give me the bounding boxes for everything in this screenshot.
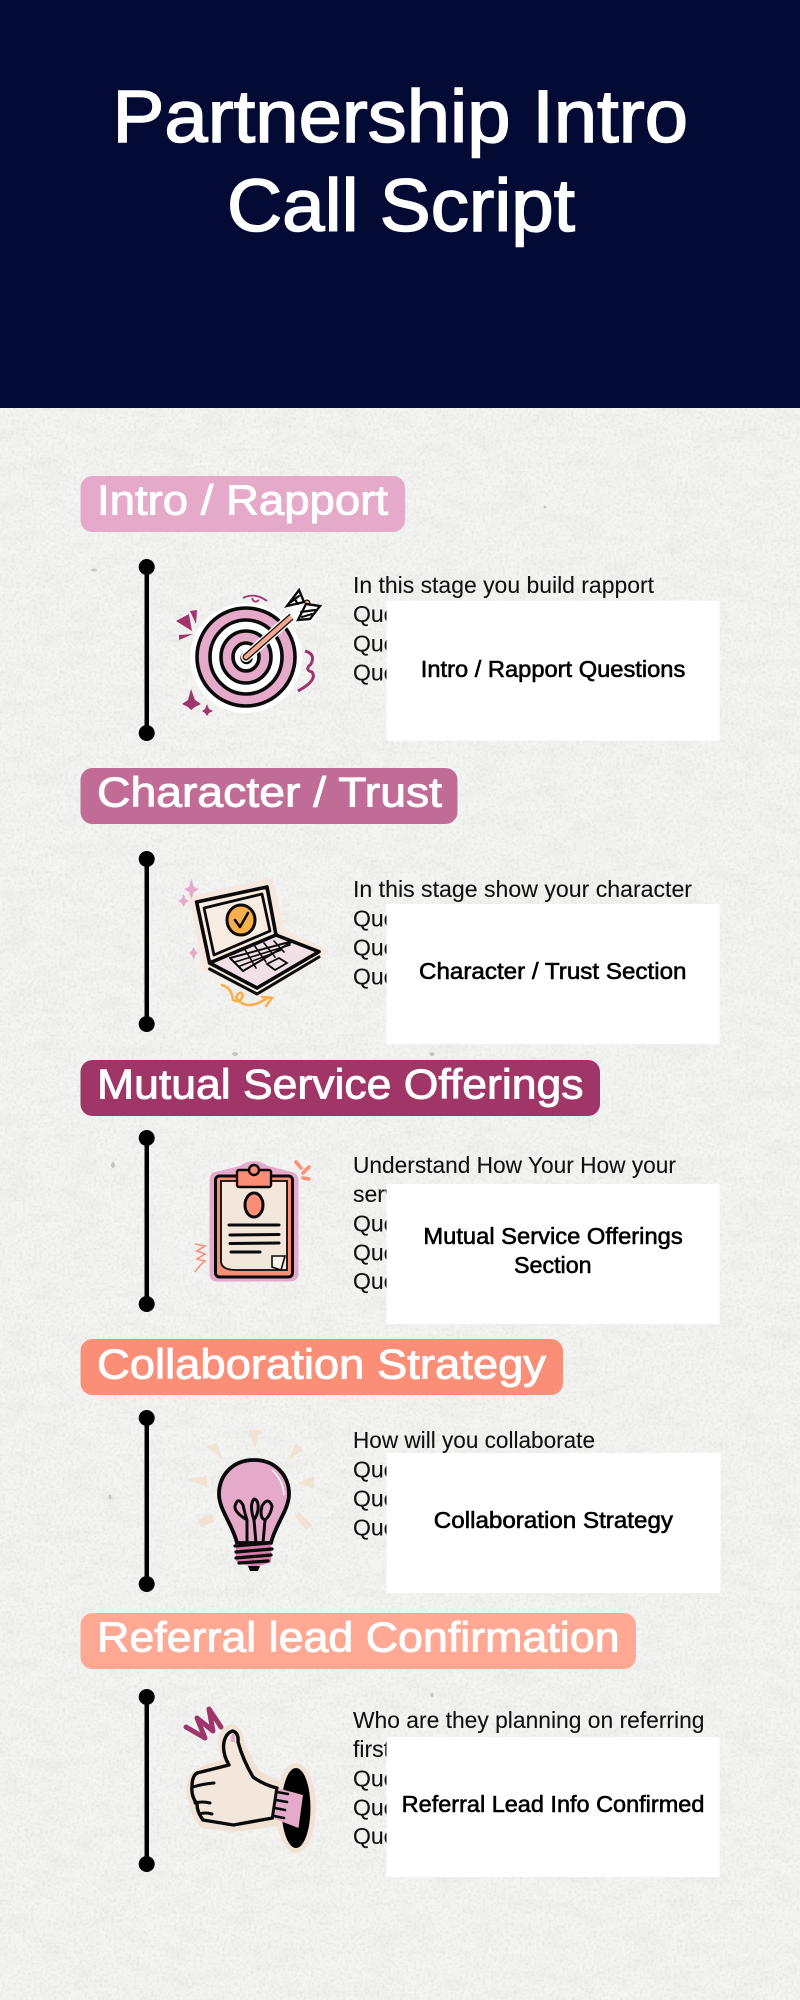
heading: character trust <box>80 768 458 824</box>
panel: character trust <box>80 768 720 1044</box>
icon: clipboard <box>195 1161 309 1282</box>
text: referral prompts <box>353 1707 704 1849</box>
text: intro rapport prompts: Question 1 <box>353 601 464 627</box>
panel: collaboration strategy <box>80 1339 720 1593</box>
card: collaboration strategy <box>386 1453 720 1593</box>
text: referral prompts: first <box>353 1736 391 1762</box>
icon: thumbs up <box>186 1709 316 1853</box>
text: mutual service prompts: Understand How Your How your <box>353 1152 676 1178</box>
text: mutual service prompts: services <box>353 1181 437 1207</box>
timeline connector <box>139 1410 155 1592</box>
card: mutual service offerings section: Section <box>514 1252 592 1278</box>
text: collaboration prompts: Question 3 <box>353 1514 464 1540</box>
text: character trust prompts: Question 1 <box>353 906 464 932</box>
text: character trust prompts: Question 2 <box>353 934 464 960</box>
text: referral prompts: Who are they planning on referring <box>353 1707 704 1733</box>
heading: referral lead confirmation: Referral lead Confirmation <box>97 1614 620 1660</box>
text: collaboration prompts: Question 2 <box>353 1486 464 1512</box>
text: mutual service prompts: Question 3 <box>353 1268 464 1294</box>
text: mutual service prompts: Question 2 <box>353 1240 464 1266</box>
heading: collaboration strategy: Collaboration Strategy <box>97 1340 546 1388</box>
panel: referral lead confirmation <box>80 1613 720 1877</box>
text: collaboration prompts: Question 1 <box>353 1456 464 1482</box>
heading: intro rapport: Intro / Rapport <box>97 476 388 524</box>
card: character trust section: Character / Trust Section <box>419 958 686 984</box>
heading: intro rapport <box>80 476 405 532</box>
text: intro rapport prompts <box>353 572 655 686</box>
text: collaboration prompts <box>353 1427 595 1540</box>
text: mutual service prompts <box>353 1152 676 1294</box>
panel: mutual service offerings <box>80 1060 720 1324</box>
text: character trust prompts: In this stage show your character <box>353 876 692 902</box>
icon: target with arrow <box>176 586 322 716</box>
text: collaboration prompts: How will you collaborate <box>353 1427 595 1453</box>
card: mutual service offerings section: Mutual Service Offerings <box>423 1223 683 1249</box>
text: referral prompts: Question 2 <box>353 1794 464 1820</box>
text: character trust prompts <box>353 876 692 990</box>
card: referral lead info confirmed: Referral Lead Info Confirmed <box>402 1791 704 1817</box>
title: Call Script <box>227 164 575 247</box>
icon: laptop with check mark <box>178 879 326 1006</box>
title: Partnership Intro <box>112 75 688 158</box>
panel: intro rapport <box>80 476 720 741</box>
text: character trust prompts: Question 3 <box>353 964 464 990</box>
text: referral prompts: Question 3 <box>353 1823 464 1849</box>
timeline connector <box>139 1130 155 1312</box>
text: mutual service prompts: Question 1 <box>353 1210 464 1236</box>
card: intro rapport questions <box>386 601 720 741</box>
timeline connector <box>139 851 155 1032</box>
icon: light bulb <box>188 1430 314 1571</box>
card: mutual service offerings section <box>386 1184 720 1324</box>
heading: mutual service offerings: Mutual Service Offerings <box>97 1060 584 1108</box>
heading: character trust: Character / Trust <box>97 768 442 816</box>
card: referral lead info confirmed <box>386 1737 720 1877</box>
text: intro rapport prompts: In this stage you build rapport <box>353 572 655 598</box>
card: character trust section <box>386 904 720 1044</box>
card: collaboration strategy: Collaboration Strategy <box>434 1507 674 1533</box>
timeline connector <box>139 559 155 741</box>
text: intro rapport prompts: Question 3 <box>353 660 464 686</box>
text: referral prompts: Question 1 <box>353 1766 464 1792</box>
paper background <box>0 408 800 2000</box>
header band <box>0 0 800 408</box>
text: intro rapport prompts: Question 2 <box>353 630 464 656</box>
title <box>112 75 688 247</box>
card: intro rapport questions: Intro / Rapport Questions <box>421 656 685 682</box>
timeline connector <box>139 1689 155 1872</box>
